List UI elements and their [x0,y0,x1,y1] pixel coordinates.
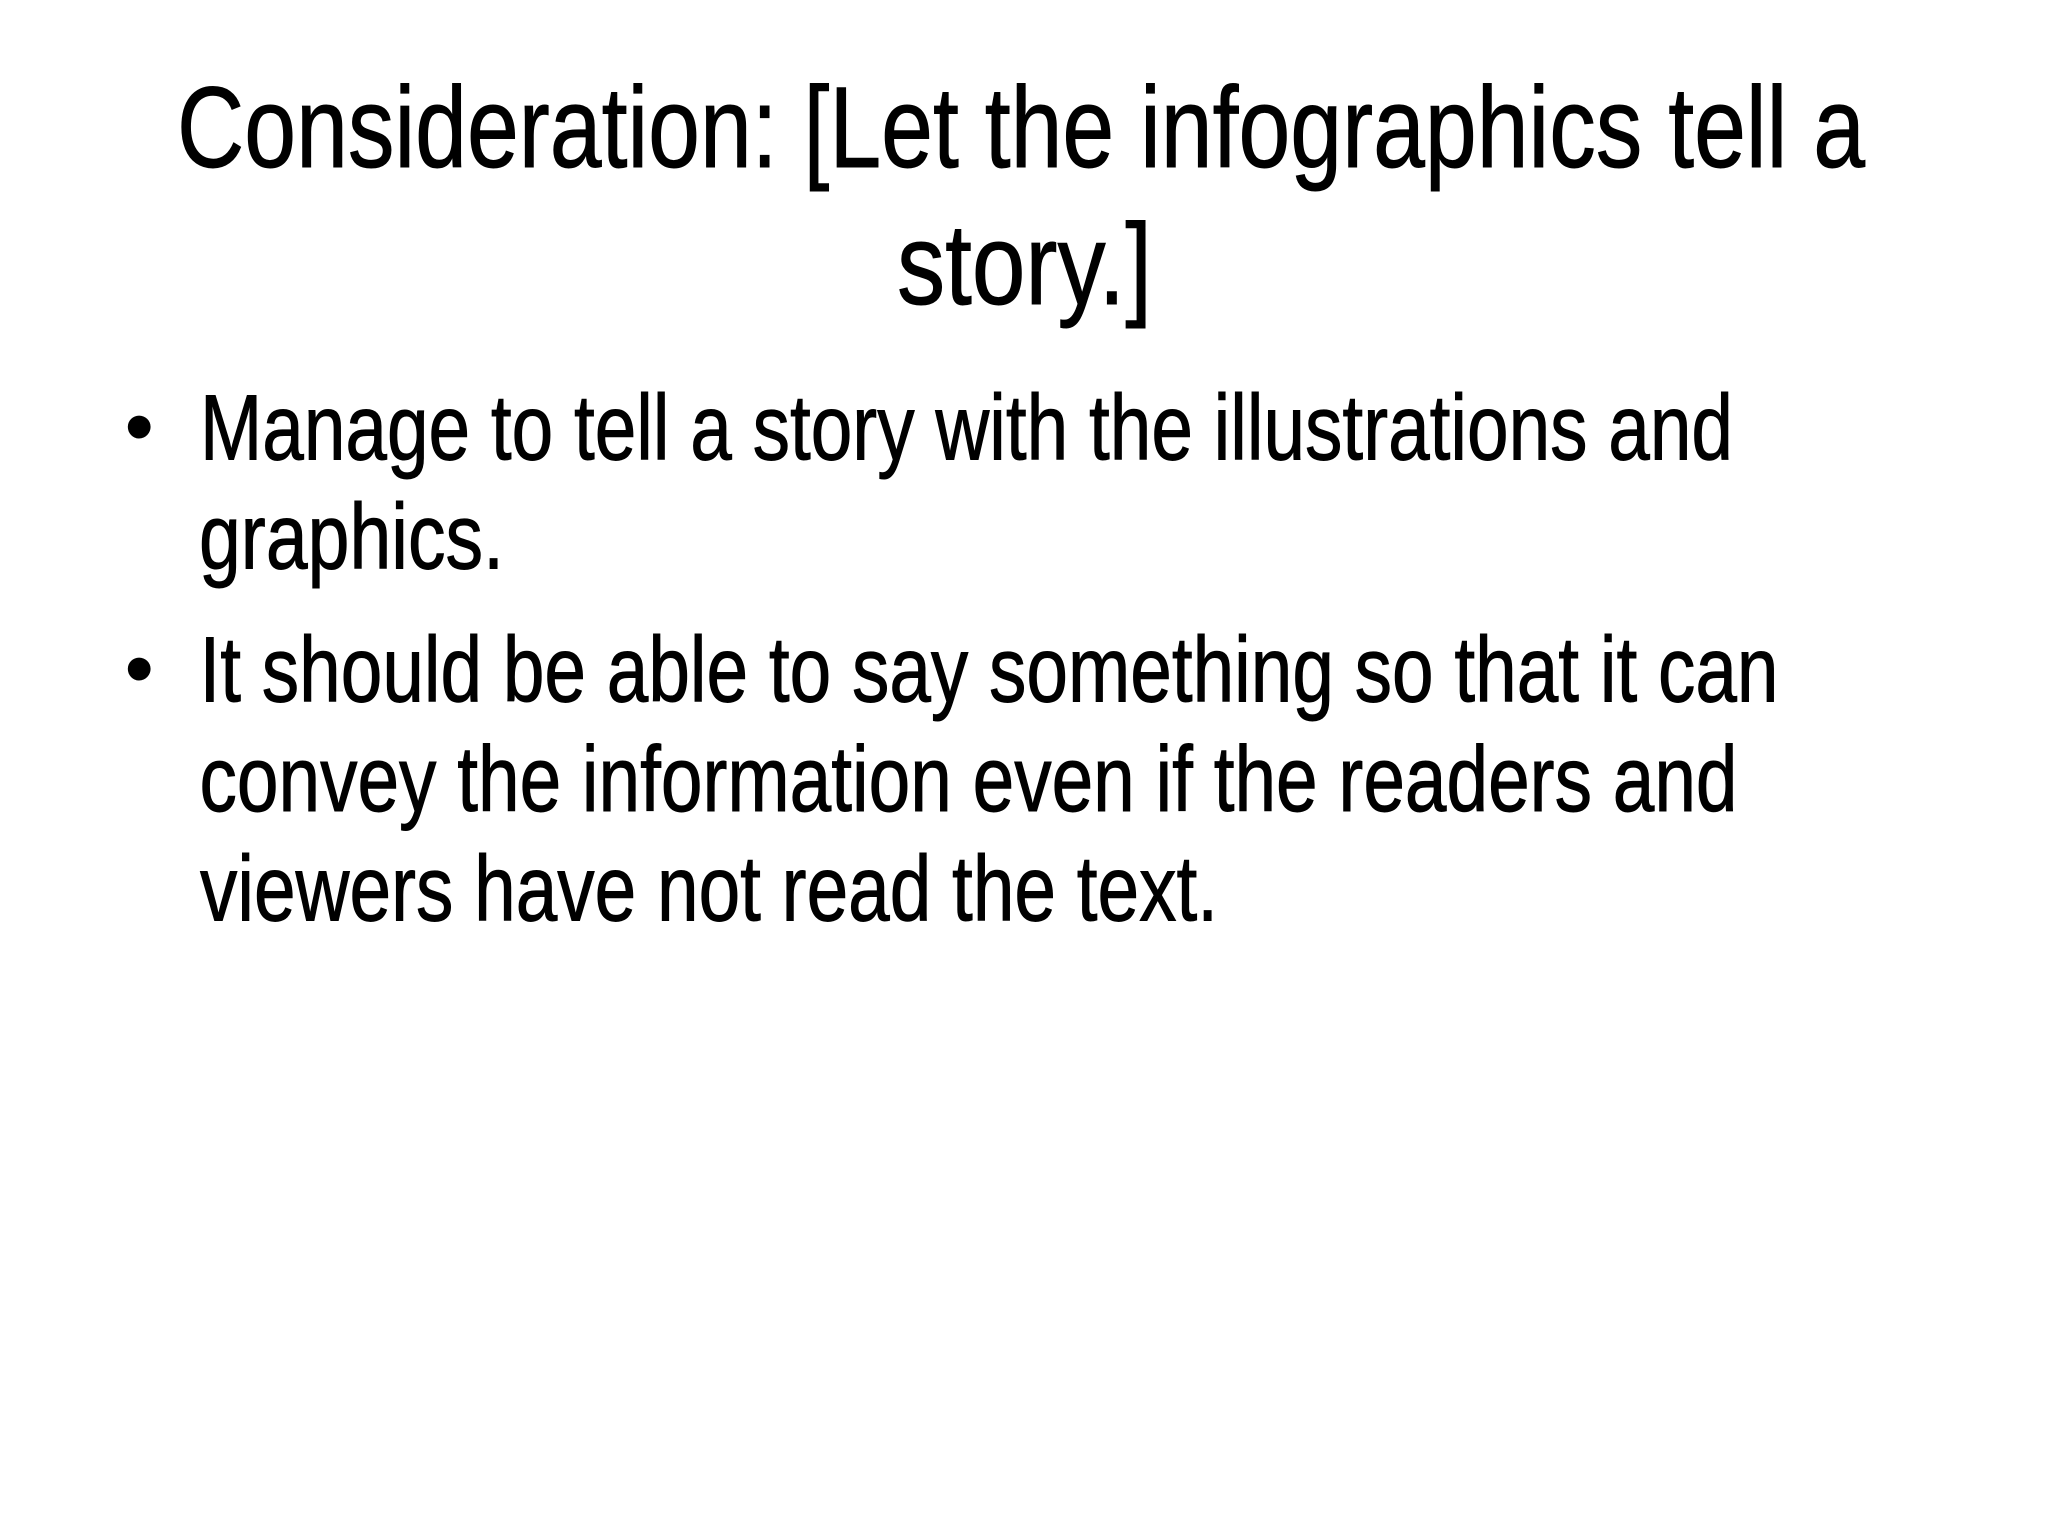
bullet point 1: graphics. [199,485,504,589]
title: story.] [897,201,1152,329]
bullet point 2: • [124,621,154,715]
bullet point 1 [124,376,1733,589]
bullet list [124,376,1778,941]
bullet point 2 [124,618,1778,940]
bullet point 1: • [124,379,154,473]
title [177,64,1865,329]
bullet point 1: Manage to tell a story with the illustrations and [200,376,1733,480]
bullet point 2: viewers have not read the text. [200,836,1218,940]
bullet point 2: convey the information even if the readers and [200,727,1738,831]
